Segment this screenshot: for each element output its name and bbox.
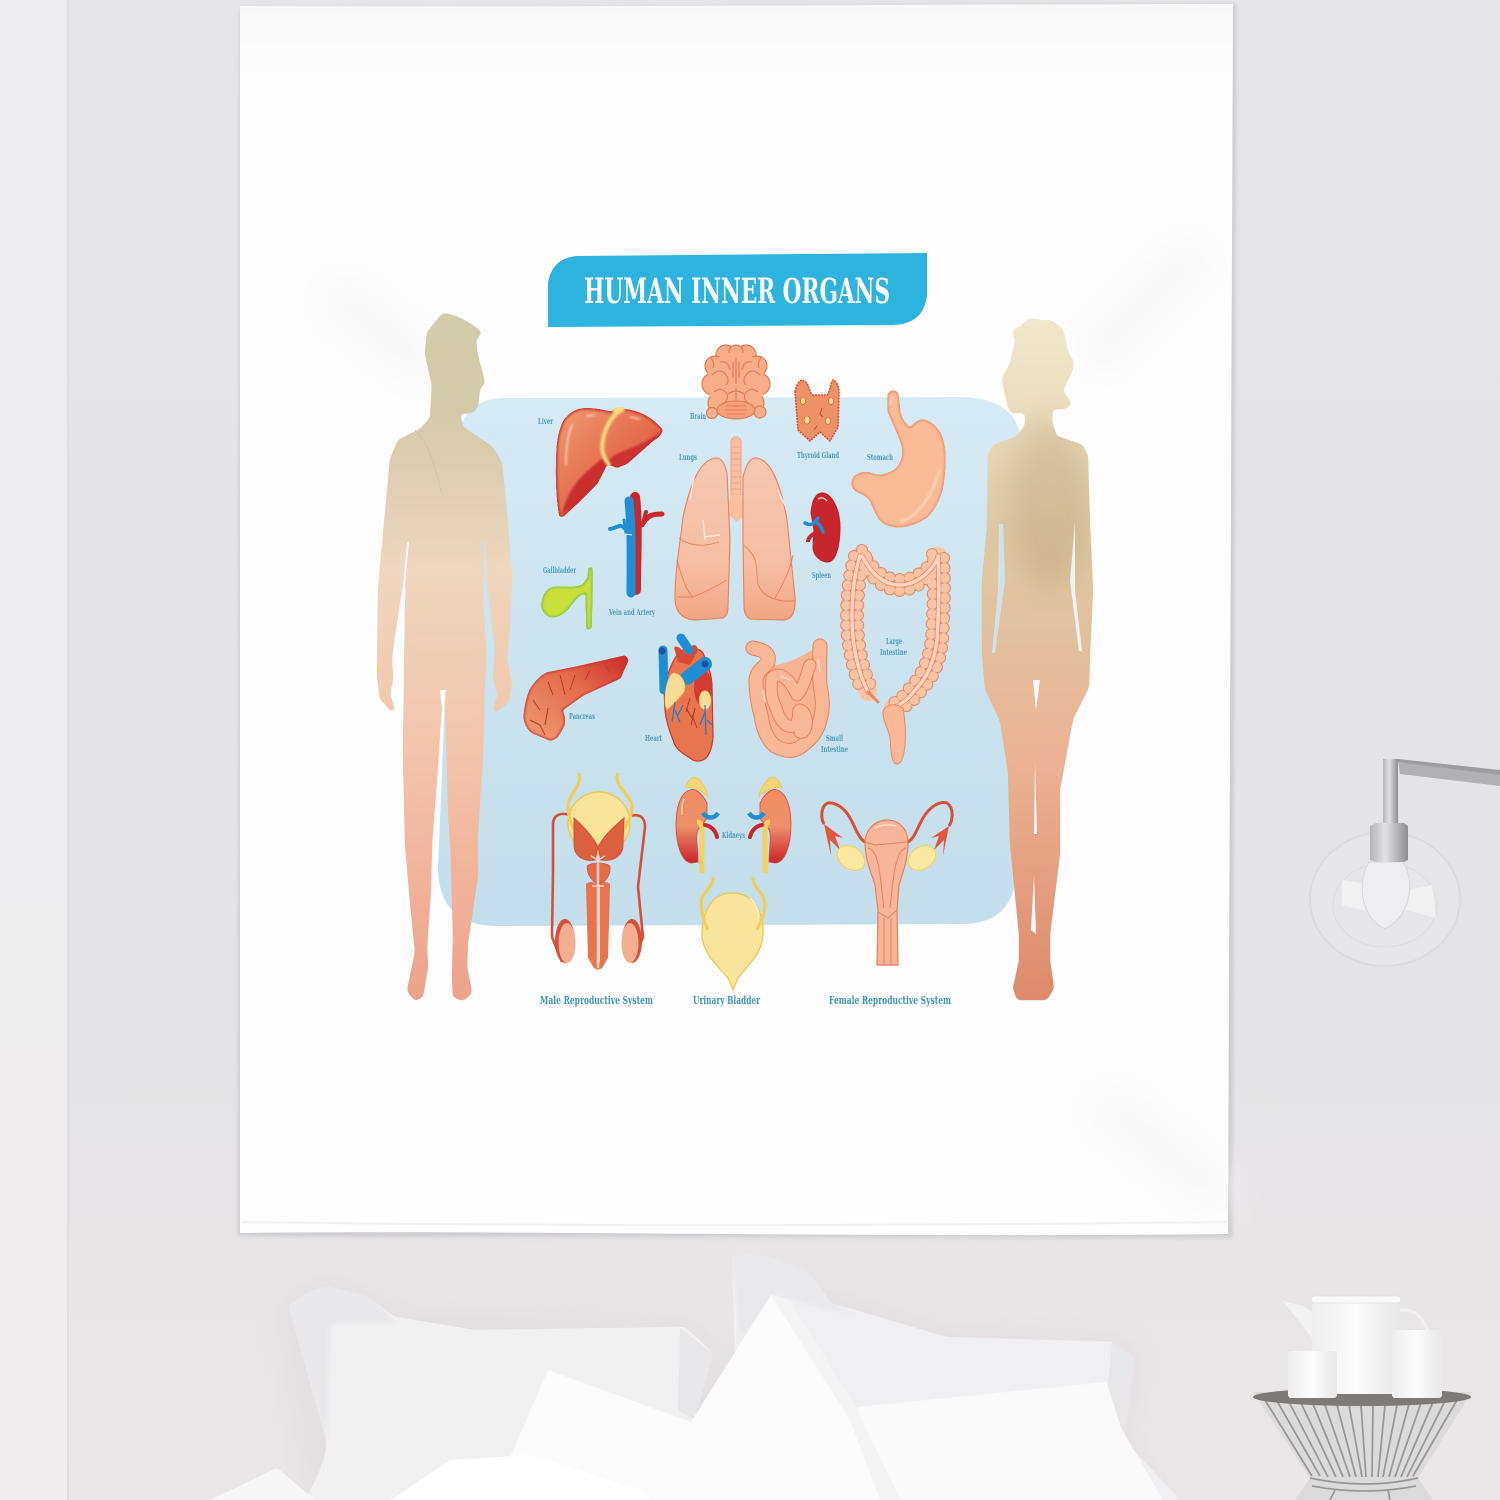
organ labels: Large — [886, 637, 902, 647]
organ: male reproductive system — [552, 773, 645, 970]
heading: urinary bladder: Urinary Bladder — [693, 993, 761, 1007]
organ labels: Kidneys — [722, 831, 745, 841]
organ: large intestine — [846, 550, 945, 764]
male silhouette — [377, 313, 512, 1001]
wall lamp — [1310, 759, 1500, 966]
organ: vein and artery — [610, 497, 662, 593]
organ: urinary bladder — [701, 877, 765, 990]
female silhouette — [982, 319, 1093, 1000]
organ: heart — [658, 638, 713, 761]
organ labels: Thyroid Gland — [797, 451, 839, 461]
organ: lungs — [675, 437, 795, 620]
organ labels: Spleen — [812, 571, 831, 581]
organ: small intestine — [753, 645, 823, 752]
organ labels: Stomach — [867, 453, 893, 463]
organ labels: Lungs — [679, 453, 697, 463]
organ: female reproductive system — [822, 803, 952, 965]
organ: gallbladder — [542, 568, 592, 629]
organ labels: Intestine — [821, 745, 848, 755]
heading: male reproductive system: Male Reproductive System — [540, 993, 653, 1007]
organ labels: Liver — [538, 417, 553, 427]
organ labels: Pancreas — [569, 712, 595, 722]
light blue background panel — [438, 397, 1022, 926]
heading: female reproductive system: Female Reproductive System — [829, 993, 951, 1007]
organ: spleen — [805, 493, 840, 562]
organ: brain — [702, 345, 770, 419]
organ: pancreas — [524, 656, 628, 740]
title banner — [548, 253, 927, 327]
organ: liver — [557, 409, 662, 516]
organ labels: Small — [826, 734, 843, 744]
organ labels: Intestine — [880, 648, 907, 658]
bed pillows and duvet — [210, 1254, 1180, 1500]
organ: kidneys — [676, 777, 791, 873]
title banner: HUMAN INNER ORGANS — [584, 271, 890, 312]
organ: thyroid gland — [795, 380, 839, 441]
tapestry — [238, 4, 1236, 1238]
organ labels: Heart — [645, 734, 662, 744]
organ labels: Vein and Artery — [608, 608, 656, 618]
organ labels: Brain — [690, 412, 706, 422]
side table with tea set — [1253, 1296, 1472, 1500]
organ: stomach — [852, 391, 945, 527]
organ labels — [538, 412, 907, 841]
organ labels: Gallbladder — [543, 566, 576, 576]
